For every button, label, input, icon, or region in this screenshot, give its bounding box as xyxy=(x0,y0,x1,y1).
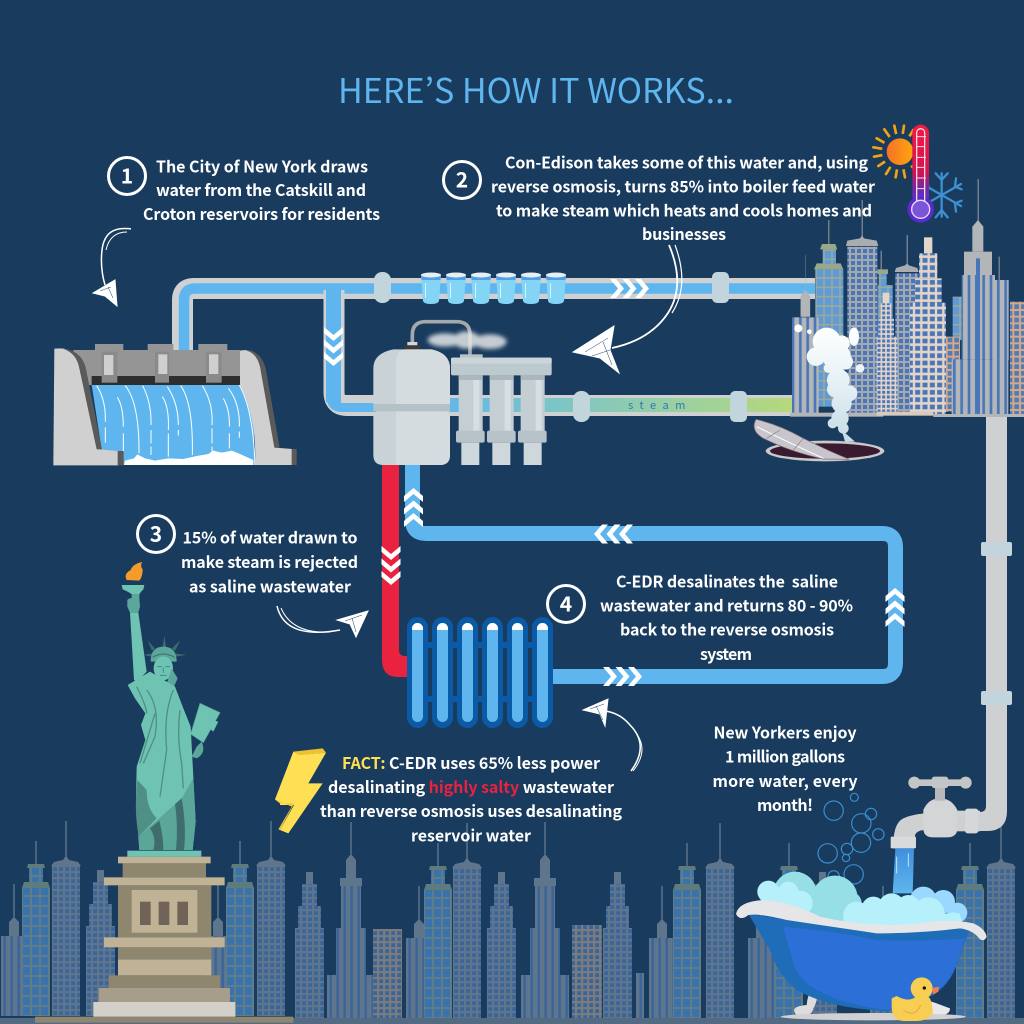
water stream xyxy=(893,848,914,893)
fact text: reservoir water xyxy=(411,822,531,846)
result text: month! xyxy=(757,792,813,816)
illustration: Statue of Liberty xyxy=(35,562,293,1023)
icon: water glasses xyxy=(421,272,566,304)
step 3 badge xyxy=(138,516,174,552)
arrows: loop flow chevrons xyxy=(382,488,904,686)
title: HERE’S HOW IT WORKS... xyxy=(338,64,734,113)
step 2 text: businesses xyxy=(642,221,726,245)
illustration: reverse osmosis unit xyxy=(373,322,552,465)
step 2 badge xyxy=(444,162,480,198)
arrow: to reservoir xyxy=(93,228,131,306)
result text: more water, every xyxy=(712,768,858,792)
arrow: to C-EDR xyxy=(583,699,642,771)
step 2 badge: 2 xyxy=(456,164,468,194)
illustration: dam with waterfall xyxy=(53,344,297,465)
illustration: bathtub with foam xyxy=(736,872,987,1020)
result text xyxy=(712,720,858,816)
fact text xyxy=(320,750,622,846)
icon: sun, thermometer and snowflake xyxy=(873,125,962,223)
fact text: desalinating highly salty wastewater xyxy=(328,774,614,798)
step 2 text xyxy=(491,150,875,245)
pipe: red rejected brine xyxy=(382,465,408,677)
step 2 text: Con-Edison takes some of this water and, using xyxy=(505,150,868,174)
icon: rubber duck xyxy=(892,977,939,1021)
step 3 text: make steam is rejected xyxy=(181,549,358,573)
step 1 text: The City of New York draws xyxy=(156,154,368,178)
step 1 badge: 1 xyxy=(121,160,133,190)
illustration: faucet xyxy=(891,777,980,848)
fact text: than reverse osmosis uses desalinating xyxy=(320,798,622,822)
step 4 badge: 4 xyxy=(560,588,572,618)
pipe: grey supply to faucet xyxy=(960,415,1012,831)
step 1 badge xyxy=(108,158,146,194)
icon: manhole with open cover xyxy=(754,419,884,461)
step 4 text: wastewater and returns 80 - 90% xyxy=(600,592,853,616)
step 4 badge xyxy=(548,586,584,622)
step 4 text: C-EDR desalinates the saline xyxy=(616,568,838,592)
arrow: to red pipe xyxy=(277,606,368,637)
step 3 badge: 3 xyxy=(150,518,162,548)
steam above the unit xyxy=(428,331,507,349)
pipe: blue return loop xyxy=(412,465,896,676)
fact text: FACT: C-EDR uses 65% less power xyxy=(342,750,600,774)
background skyline xyxy=(0,821,1024,1024)
step 1 text: Croton reservoirs for residents xyxy=(143,201,380,225)
step 3 text xyxy=(181,524,358,598)
pipe connectors xyxy=(374,272,747,422)
step 2 text: to make steam which heats and cools homes and xyxy=(496,198,872,222)
label: steam: steam xyxy=(628,397,692,413)
pipe: branch and lower pipe to steam xyxy=(326,290,800,412)
arrows: top flow chevrons xyxy=(324,279,649,366)
step 1 text xyxy=(143,154,380,225)
step 3 text: as saline wastewater xyxy=(189,574,351,598)
step 4 text: system xyxy=(700,641,752,665)
arrow: to reverse osmosis xyxy=(573,245,682,373)
illustration: city skyline with steam xyxy=(790,179,1024,442)
illustration: C-EDR stack xyxy=(407,617,553,728)
pipe: top reservoir pipe xyxy=(182,288,815,352)
result text: 1 million gallons xyxy=(725,744,845,768)
result text: New Yorkers enjoy xyxy=(714,720,856,744)
step 3 text: 15% of water drawn to xyxy=(182,524,358,548)
step 4 text xyxy=(600,568,853,665)
step 1 text: water from the Catskill and xyxy=(156,177,366,201)
icon: soap bubbles xyxy=(818,793,884,900)
step 4 text: back to the reverse osmosis xyxy=(620,616,834,640)
step 2 text: reverse osmosis, turns 85% into boiler feed water xyxy=(491,174,875,198)
icon: lightning bolt xyxy=(275,748,326,833)
